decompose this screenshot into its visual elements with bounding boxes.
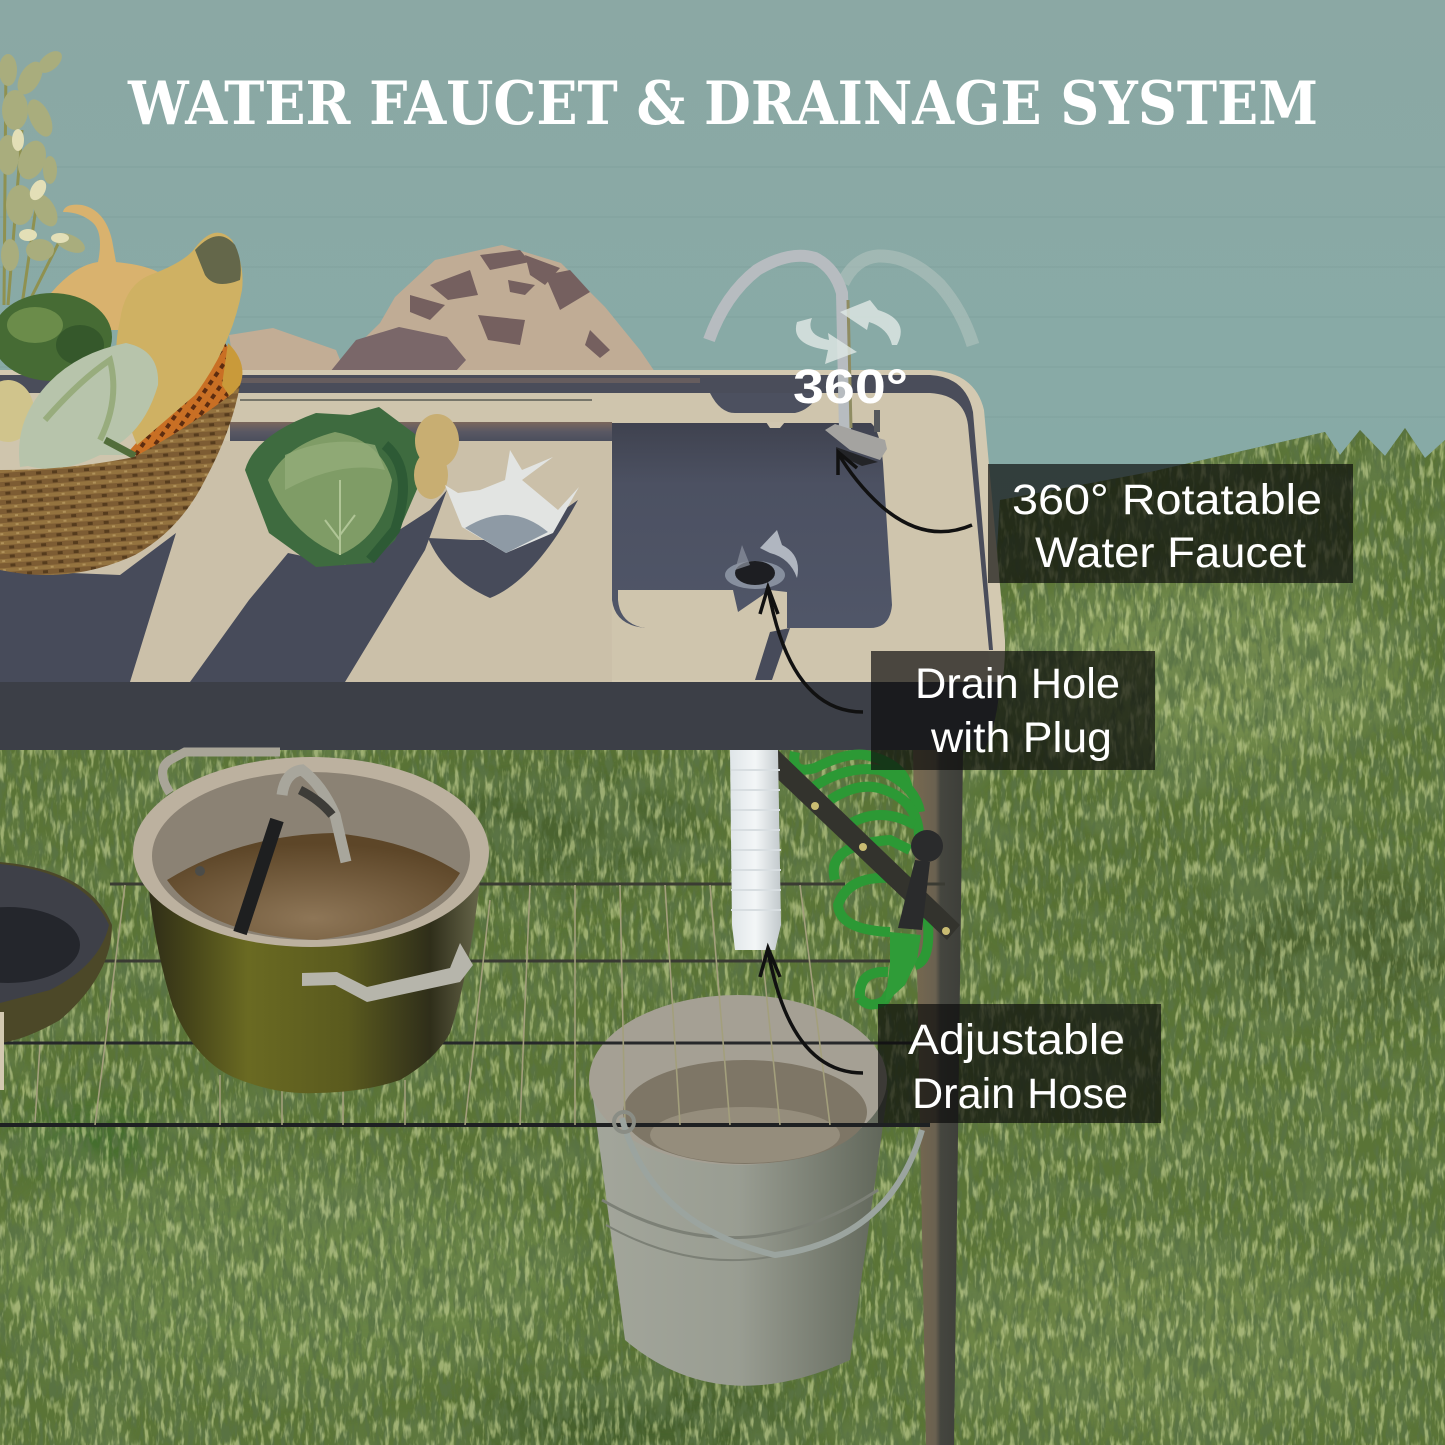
potatoes bbox=[414, 414, 459, 499]
table top: front face bbox=[0, 682, 1000, 750]
sink drain shadow bbox=[755, 628, 790, 680]
callout: faucet: Water Faucet bbox=[1035, 529, 1306, 577]
pot glass lid bbox=[152, 772, 470, 940]
callout: drain hole: Drain Hole bbox=[915, 660, 1120, 708]
arrow: drain hole callout to plug bbox=[760, 587, 863, 712]
basket interior bbox=[130, 343, 242, 460]
support bracket bbox=[747, 750, 960, 940]
arrow: drain hose callout to hose bbox=[760, 948, 863, 1073]
title: WATER FAUCET & DRAINAGE SYSTEM bbox=[127, 69, 1318, 139]
360 degree rotation arrows bbox=[796, 300, 901, 364]
bucket bbox=[589, 995, 888, 1386]
basket of vegetables bbox=[0, 205, 243, 575]
pot body bbox=[148, 880, 480, 1093]
bucket body bbox=[590, 1075, 888, 1386]
fish shadow bbox=[428, 500, 578, 598]
table top: recessed channel bbox=[0, 375, 993, 650]
sink basin bbox=[612, 423, 892, 628]
table top bbox=[0, 370, 1005, 750]
pot back handle bbox=[162, 752, 280, 793]
table top: outer rim bbox=[0, 370, 1005, 750]
pot lid handle bbox=[282, 770, 346, 862]
sink top notch bbox=[766, 422, 785, 428]
basket shadow bbox=[0, 533, 176, 682]
potato bbox=[0, 380, 34, 442]
bucket handle bbox=[614, 1112, 922, 1255]
pot lid shadow bbox=[240, 820, 277, 933]
faucet lever bbox=[874, 410, 880, 432]
pot inner pool bbox=[167, 833, 460, 940]
faucet recess bbox=[710, 393, 820, 413]
hose nozzle and clamp bbox=[885, 830, 943, 1003]
ruler line bbox=[240, 399, 592, 401]
pot front handle bbox=[302, 943, 473, 1002]
callout: drain hose: Drain Hose bbox=[912, 1070, 1128, 1118]
pot bbox=[133, 752, 489, 1093]
basket front bbox=[0, 385, 240, 575]
frying pan bbox=[0, 862, 112, 1090]
table leg bbox=[913, 750, 963, 1445]
yellow gourd bbox=[116, 233, 243, 445]
green coiled hose bbox=[794, 752, 928, 1005]
broccoli bbox=[0, 293, 112, 381]
pot lid vent bbox=[195, 866, 205, 876]
table top: cutting board bbox=[0, 441, 612, 682]
rocks bbox=[229, 245, 655, 372]
360 label: 360° bbox=[793, 361, 908, 414]
background: teal wall bbox=[0, 0, 1445, 760]
faucet ghost spout bbox=[843, 256, 973, 345]
pot rim bbox=[133, 757, 489, 947]
faucet spout bbox=[709, 256, 845, 432]
fish bbox=[445, 450, 579, 553]
callout: drain hose: Adjustable bbox=[908, 1016, 1125, 1064]
plant on left edge bbox=[0, 47, 88, 305]
pumpkin bbox=[51, 205, 158, 330]
white-green pumpkin bbox=[19, 343, 158, 469]
drain plug bbox=[725, 530, 798, 589]
wire rack bbox=[0, 884, 945, 1125]
callout: faucet bbox=[988, 464, 1353, 583]
callout: drain hole: with Plug bbox=[930, 714, 1112, 762]
faucet base bbox=[825, 424, 887, 460]
cabbage bbox=[245, 407, 421, 567]
cabbage shadow bbox=[190, 490, 447, 682]
sink sunlit corner bbox=[618, 590, 787, 628]
callout: drain hole bbox=[871, 651, 1155, 770]
background: grass lawn bbox=[0, 420, 1445, 1445]
bucket opening bbox=[589, 995, 887, 1165]
table top: cutting board groove bbox=[230, 422, 612, 441]
callout: drain hose bbox=[878, 1004, 1161, 1123]
callout: faucet: 360° Rotatable bbox=[1012, 476, 1322, 524]
arrow: faucet callout to faucet bbox=[838, 452, 972, 532]
white drain hose bbox=[730, 750, 781, 950]
table top: main beige surface bbox=[0, 393, 992, 680]
faucet bbox=[709, 256, 973, 466]
